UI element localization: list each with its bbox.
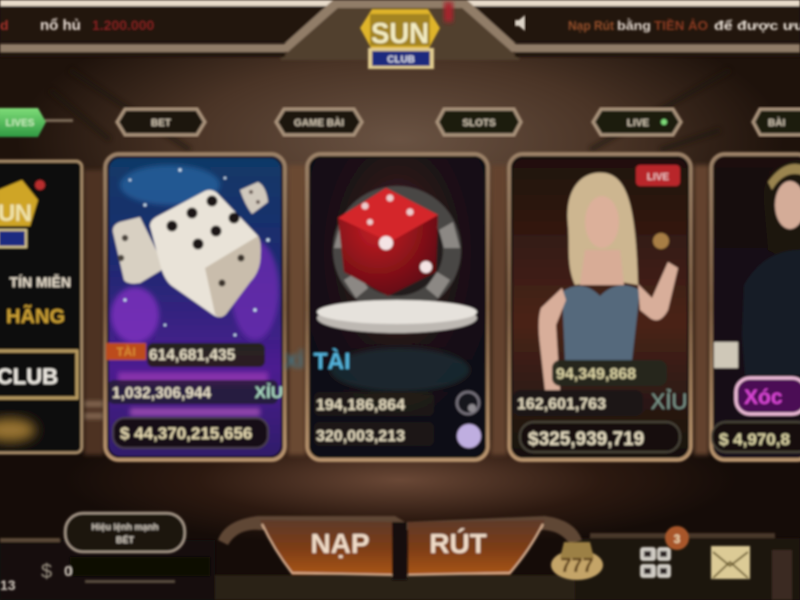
icon: poker chip (333, 186, 461, 314)
deposit and withdraw buttons (218, 516, 582, 580)
sparkles (111, 165, 279, 416)
xóc đĩa neon label: Xóc (744, 386, 783, 409)
icon: 777 slot: 777 (560, 555, 594, 577)
value row 1: 194,186,864 (316, 397, 405, 414)
balance: 0 (64, 563, 72, 580)
value row 2: 320,003,213 (316, 428, 405, 445)
value row 1: 614,681,435 (149, 347, 236, 364)
panel: Tài Xỉu dice card: TÀI (116, 344, 136, 359)
tab: featured (0, 108, 73, 137)
panel: promo card left (0, 161, 82, 453)
jackpot: $325,939,719 (528, 429, 644, 450)
panel: live dealer card (509, 154, 691, 460)
tab: LIVE: LIVE (627, 118, 649, 129)
tài badge (106, 343, 146, 360)
notification badge (665, 526, 689, 550)
jackpot (712, 422, 800, 452)
panel: partial right card (711, 154, 800, 460)
ticker left: 1.200.000 (92, 17, 154, 33)
ticker left: d (0, 17, 9, 33)
logo (360, 2, 453, 69)
button: RÚT (408, 520, 545, 575)
tab: partial right: BÀI (768, 116, 785, 129)
balance: 13 (0, 577, 16, 593)
tab: SLOTS: SLOTS (462, 118, 496, 129)
xỉu overflow label: XỈ (285, 350, 304, 373)
button: NẠP: NẠP (310, 528, 370, 559)
tab: GAME BÀI: GAME BÀI (294, 116, 344, 129)
icon: gift boxes (640, 547, 671, 578)
top bar (0, 0, 800, 60)
promo button (0, 351, 77, 398)
live badge: LIVE (647, 172, 669, 183)
panel: Tài Xỉu dice card (105, 154, 285, 460)
jackpot (520, 422, 680, 452)
value row 2 (108, 380, 283, 404)
icon: dark orb (457, 392, 479, 414)
pedestal (317, 300, 477, 333)
ticker left (0, 17, 154, 34)
value row 1 (147, 343, 265, 367)
tab: BET (117, 109, 205, 135)
dealer figure (539, 173, 678, 390)
login hint button: Hiệu lệnh mạnh (91, 522, 159, 532)
ticker right: Nạp Rút (568, 18, 615, 33)
balance (0, 557, 210, 593)
haze (330, 348, 470, 392)
tab: partial right (753, 109, 800, 135)
live badge (636, 165, 680, 186)
ticker left: nổ hủ (40, 17, 81, 34)
tab: SLOTS (437, 109, 521, 135)
login hint button: BẾT (116, 535, 135, 545)
icon: mail (711, 546, 750, 579)
promo highlight: HÃNG (6, 305, 65, 328)
logo: CLUB (387, 54, 415, 66)
value row 2: 1,032,306,944 (112, 385, 212, 402)
value ribbons (314, 392, 434, 446)
button: RÚT: RÚT (429, 528, 487, 559)
ticker right (568, 18, 800, 33)
login hint button (65, 513, 185, 552)
ticker right: TIỀN ẢO (654, 18, 708, 33)
icon: big die (150, 190, 261, 317)
pillars between cards (84, 165, 709, 455)
tab: LIVE (593, 109, 681, 135)
logo: SUN (371, 18, 429, 50)
icon: red die (338, 188, 438, 296)
dealer figure (714, 160, 800, 375)
panel: Tài Xỉu red dice card (307, 154, 488, 460)
promo gold swirl (0, 418, 36, 442)
value row 2: XỈU (255, 383, 283, 402)
bottom bar (0, 533, 800, 600)
wing decorations (218, 516, 582, 545)
tab: GAME BÀI (276, 109, 362, 135)
button: NẠP (260, 520, 392, 575)
jackpot: $ 44,370,215,656 (120, 424, 252, 443)
tab: BET: BET (151, 118, 171, 129)
balance: $ (41, 561, 52, 583)
value row 2: 162,601,763 (517, 396, 606, 413)
jackpot (113, 418, 268, 448)
icon: small die top right (240, 182, 268, 214)
tài label: TÀI (313, 347, 351, 374)
value row 2: XỈU (651, 389, 687, 414)
promo logo (0, 180, 45, 247)
icon: speaker (515, 15, 525, 31)
ticker right: để được ưu (714, 18, 800, 33)
icon: small die left (113, 217, 165, 284)
icon: 777 slot (551, 542, 603, 580)
ticker right: bằng (617, 18, 651, 33)
promo text: TÍN MIỄN (10, 274, 71, 290)
value row 1 (552, 360, 667, 386)
icon: light orb (457, 424, 481, 448)
xóc đĩa neon label (736, 378, 800, 414)
notification badge: 3 (674, 532, 681, 546)
value row 1: 94,349,868 (556, 366, 636, 383)
value row 2 (513, 389, 687, 416)
jackpot: $ 4,970,8 (719, 430, 790, 449)
tab: featured: LIVES (6, 118, 35, 129)
